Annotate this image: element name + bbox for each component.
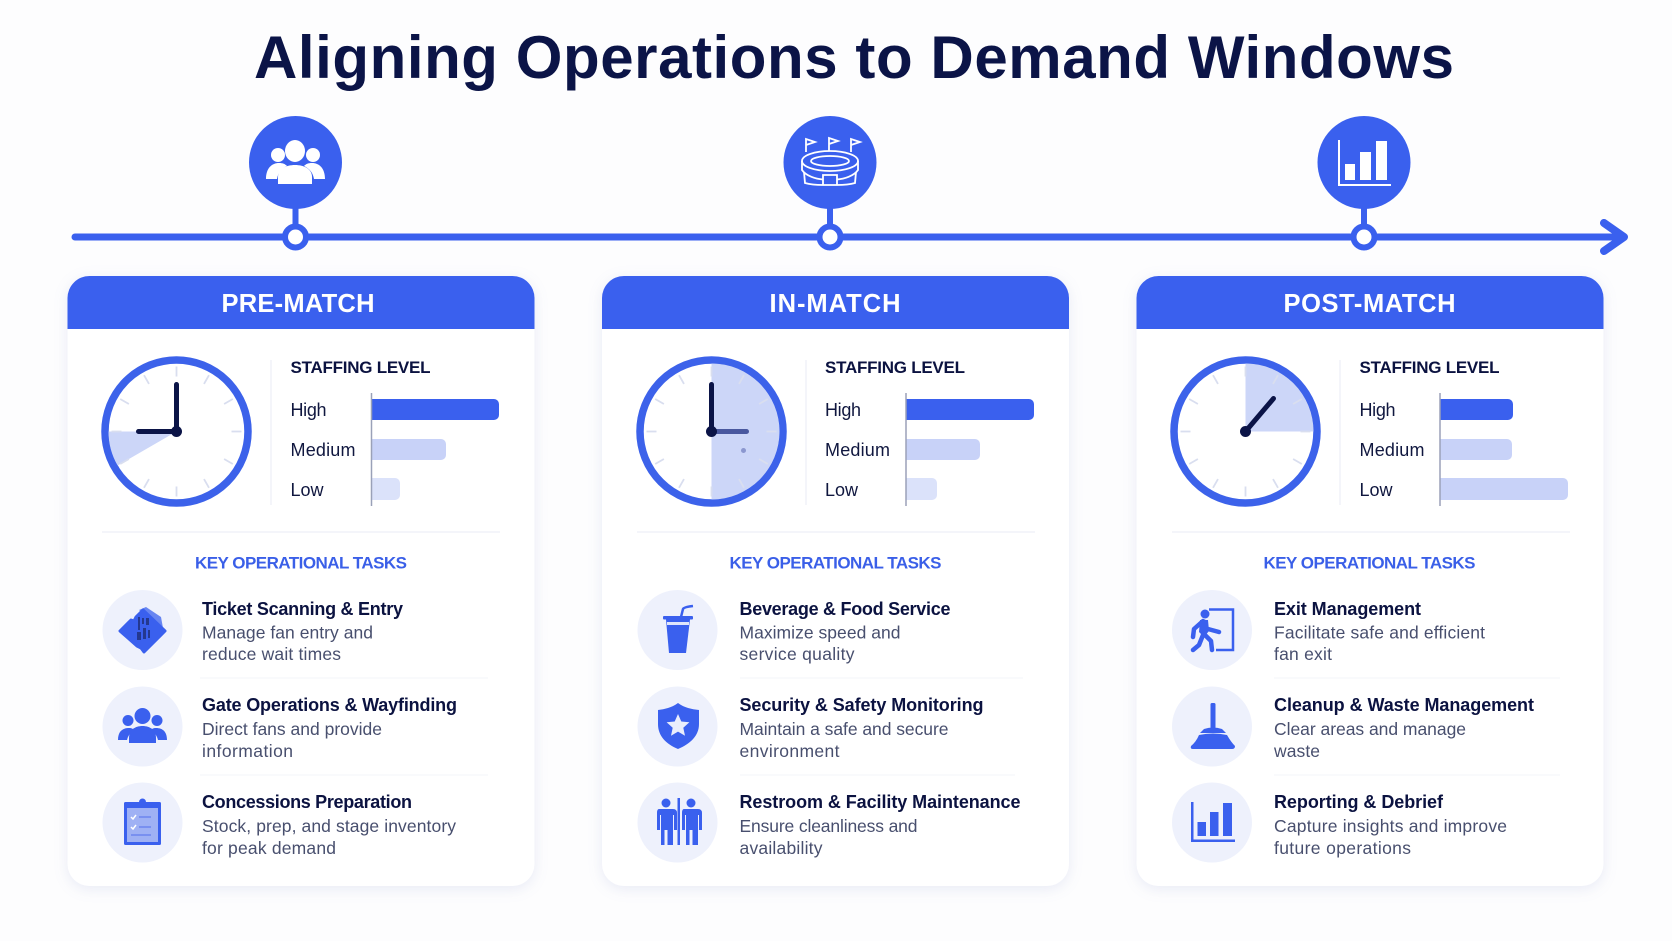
staffing level chart: Low	[825, 480, 859, 500]
task: cleanup: Cleanup & Waste Management	[1274, 695, 1534, 715]
staffing level chart: High	[290, 400, 326, 420]
task: security: environment	[740, 741, 840, 761]
staffing level chart	[1360, 358, 1568, 506]
task: restroom: Restroom & Facility Maintenance	[740, 792, 1020, 812]
icon: people	[118, 708, 167, 743]
task: gate operations: Gate Operations & Wayfinding	[202, 695, 457, 715]
timeline marker: post-match chart	[1318, 116, 1410, 248]
panel header: PRE-MATCH	[222, 290, 374, 318]
panel header	[1136, 276, 1604, 329]
staffing level chart: STAFFING LEVEL	[1360, 358, 1500, 377]
icon: people	[266, 140, 325, 184]
task: ticket scanning: Ticket Scanning & Entry	[202, 599, 403, 619]
staffing level chart: High	[825, 400, 861, 420]
icon: ticket	[120, 607, 165, 652]
task: beverage: Beverage & Food Service	[740, 599, 950, 619]
panel header: IN-MATCH	[770, 290, 900, 318]
staffing level chart: STAFFING LEVEL	[290, 358, 430, 377]
task: gate operations: information	[202, 741, 293, 761]
task: ticket scanning: Manage fan entry and	[202, 622, 373, 642]
task: beverage: service quality	[740, 644, 855, 664]
task: exit: Facilitate safe and efficient	[1274, 622, 1485, 642]
timeline marker: pre-match people	[249, 116, 342, 248]
icon: stadium	[802, 138, 860, 185]
title: Aligning Operations to Demand Windows	[254, 24, 1454, 91]
timeline marker: in-match stadium	[784, 116, 876, 248]
task: security: Security & Safety Monitoring	[740, 695, 984, 715]
icon: clipboard	[124, 799, 161, 845]
panel: in-match	[602, 276, 1069, 886]
task: reporting: Capture insights and improve	[1274, 816, 1507, 836]
task: concessions	[102, 782, 456, 862]
task: restroom: Ensure cleanliness and	[740, 816, 918, 836]
timeline with arrow	[75, 223, 1624, 251]
clock	[1174, 360, 1317, 503]
task: concessions: for peak demand	[202, 838, 336, 858]
task: gate operations: Direct fans and provide	[202, 719, 382, 739]
task: beverage: Maximize speed and	[740, 622, 900, 642]
panel header	[68, 276, 534, 329]
icon: bar chart	[1191, 802, 1235, 842]
task: concessions: Concessions Preparation	[202, 792, 412, 812]
task: reporting: future operations	[1274, 838, 1411, 858]
task: gate operations	[102, 686, 457, 766]
task: cleanup: waste	[1273, 741, 1320, 761]
task: ticket scanning: reduce wait times	[202, 644, 341, 664]
task: security: Maintain a safe and secure	[740, 719, 948, 739]
staffing level chart	[290, 358, 499, 506]
task: ticket scanning	[102, 590, 403, 670]
task: exit	[1172, 590, 1485, 670]
staffing level chart: Low	[1360, 480, 1394, 500]
icon: broom	[1191, 703, 1235, 749]
staffing level chart: Medium	[1360, 440, 1424, 460]
task: exit: Exit Management	[1274, 599, 1421, 619]
clock	[105, 360, 248, 503]
task: restroom	[638, 782, 1020, 862]
task: reporting	[1172, 782, 1507, 862]
task: concessions: Stock, prep, and stage inventory	[202, 816, 456, 836]
staffing level chart: Medium	[290, 440, 356, 460]
task: exit: fan exit	[1274, 644, 1332, 664]
task: restroom: availability	[740, 838, 823, 858]
icon: shield	[658, 703, 699, 749]
task: cleanup	[1172, 686, 1534, 766]
panel: post-match	[1136, 276, 1604, 886]
panel: pre-match	[68, 276, 534, 886]
icon: cup	[663, 606, 693, 653]
key tasks heading: KEY OPERATIONAL TASKS	[730, 554, 942, 572]
icon: exit	[1193, 610, 1233, 650]
task: beverage	[638, 590, 950, 670]
task: security	[638, 686, 984, 766]
task: reporting: Reporting & Debrief	[1274, 792, 1444, 812]
icon: bar chart	[1338, 140, 1391, 186]
staffing level chart: High	[1360, 400, 1396, 420]
icon: restroom	[657, 798, 702, 845]
key tasks heading: KEY OPERATIONAL TASKS	[1264, 554, 1476, 572]
clock	[640, 360, 783, 503]
staffing level chart	[825, 358, 1034, 506]
panel header: POST-MATCH	[1284, 290, 1456, 318]
staffing level chart: Medium	[825, 440, 890, 460]
staffing level chart: STAFFING LEVEL	[825, 358, 965, 377]
panel header	[602, 276, 1069, 329]
key tasks heading: KEY OPERATIONAL TASKS	[195, 554, 407, 572]
task: cleanup: Clear areas and manage	[1274, 719, 1466, 739]
staffing level chart: Low	[290, 480, 325, 500]
